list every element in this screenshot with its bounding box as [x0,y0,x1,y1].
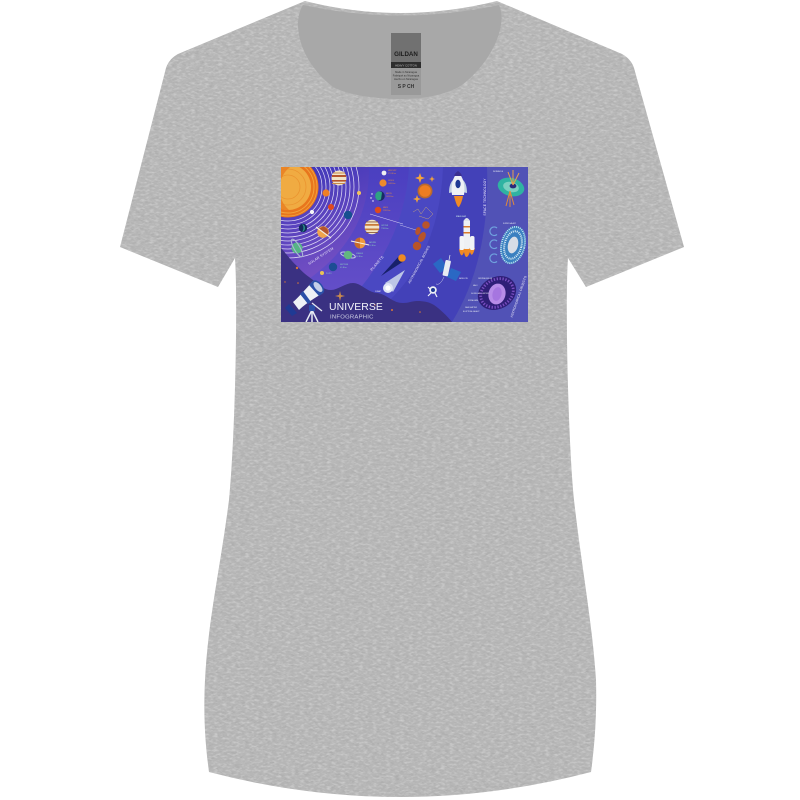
divider callout line [370,214,403,224]
icon: neptune small [329,263,337,271]
icon: telescope [285,278,327,322]
icon: saturn [316,226,331,238]
icon: black hole: WORMHOLE [493,171,504,173]
heading: planets: PLANETS [370,255,385,272]
planets list: 2.8 B km [356,256,363,258]
icon: constellation [413,207,433,219]
icon: comet white: COMET [375,291,381,293]
planets list: PLUTO [326,273,332,275]
nebula labels: DARK MATTER [465,306,478,309]
icon: uranus ringed [340,251,356,259]
planet labels: VENUS [388,180,395,182]
icon: neptune [344,211,352,219]
neck label: Made in Nicaragua [395,70,417,74]
astronomical bodies [400,173,435,250]
icon: earth [299,224,307,232]
planet labels: 228 M km [383,210,391,212]
heading: space technology: SPACE TECHNOLOGY [483,178,487,216]
panel: space technology band [391,167,487,322]
panel: astronomical bodies band [362,167,443,299]
icon: saturn large [351,238,369,248]
icon: small yellow planet [357,191,361,195]
planets list: 1.4 B km [369,245,376,247]
printed infographic [281,167,528,322]
nebula labels: GLOBULAR CLUSTER [471,292,489,295]
icon: mercury [382,171,386,175]
icon: asteroids [413,221,430,250]
neck label [391,33,421,95]
icon: spiral galaxy: SUPER GALAXY [503,222,517,225]
neck label: Hecho en Nicaragua [394,77,418,81]
icon: rocket [449,171,467,207]
panel: planets band [310,167,408,290]
planet labels: MERCURY [388,170,397,172]
icon: pluto [320,271,324,275]
planets list: NEPTUNE [340,264,349,266]
heading: astronomical objects: ASTRONOMICAL OBJECTS [510,275,528,318]
planet labels [383,170,397,212]
icon: red planet [328,204,334,210]
planets list: SATURN [369,241,377,244]
planet labels: 149 M km [386,196,394,198]
planet labels: EARTH [386,192,392,195]
icon: white moon [310,210,314,214]
planets list: 778 M km [381,228,389,230]
planets list: 4.5 B km [340,267,347,269]
icon: orange star body [418,184,432,198]
orbits [281,167,360,258]
solar system planets [289,170,361,258]
planets list [320,170,403,275]
panel: solar system band [286,188,368,278]
planet labels: 57.9 M km [388,173,396,175]
icon: black hole [493,170,526,207]
nebula labels: HALO [473,284,478,287]
icon: star small [429,176,435,182]
icon: satellite: SATELLITE [459,277,469,280]
icon: comet white [375,270,405,293]
asteroid pointer line [400,225,416,230]
heading: solar system: SOLAR SYSTEM [308,246,334,266]
icon: nebula [472,269,522,317]
icon: sun [281,167,318,218]
icon: venus [379,179,387,187]
icon: uranus [290,238,304,258]
icon: jupiter [332,170,346,186]
icon: jupiter large [365,220,379,234]
neck label: Fabriqué au Nicaragua [393,74,420,78]
planets list: JUPITER [381,225,389,227]
title: UNIVERSE [329,302,383,313]
icon: mars orbit planet [322,189,330,197]
astronomical objects [463,170,530,317]
t-shirt [120,1,684,797]
nebula labels: SPIRAL ARM [468,299,479,302]
space technology [428,171,475,297]
icon: star lower [413,195,421,203]
planet labels: 108 M km [388,183,396,185]
neck label: HEAVY COTTON [395,64,417,68]
nebula labels: ELLIPTICAL GALAXY [463,310,480,313]
nebula labels: CENTRAL BULGE [478,277,493,280]
planet labels: MARS [383,206,389,209]
icon: spiral galaxy [496,222,530,267]
neck opening [298,5,501,99]
planets list: URANUS [356,252,364,255]
icon: supernova rings [490,227,497,263]
title: INFOGRAPHIC [330,314,374,320]
neck label: GILDAN [394,51,418,58]
title [329,302,383,320]
icon: astronaut [428,277,444,297]
heading: astronomical bodies: ASTRONOMICAL BODIES [407,244,431,284]
nebula labels [463,277,493,313]
icon: earth with moons [370,191,385,202]
icon: mars [375,207,381,213]
icon: comet orange [381,254,406,276]
background stars [284,267,421,313]
icon: launch vehicle: SPACE SHIP [456,215,467,218]
neck label: S P CH [398,84,415,90]
panel: space objects background [452,167,528,322]
mound background [281,248,452,322]
icon: star large [415,173,425,183]
